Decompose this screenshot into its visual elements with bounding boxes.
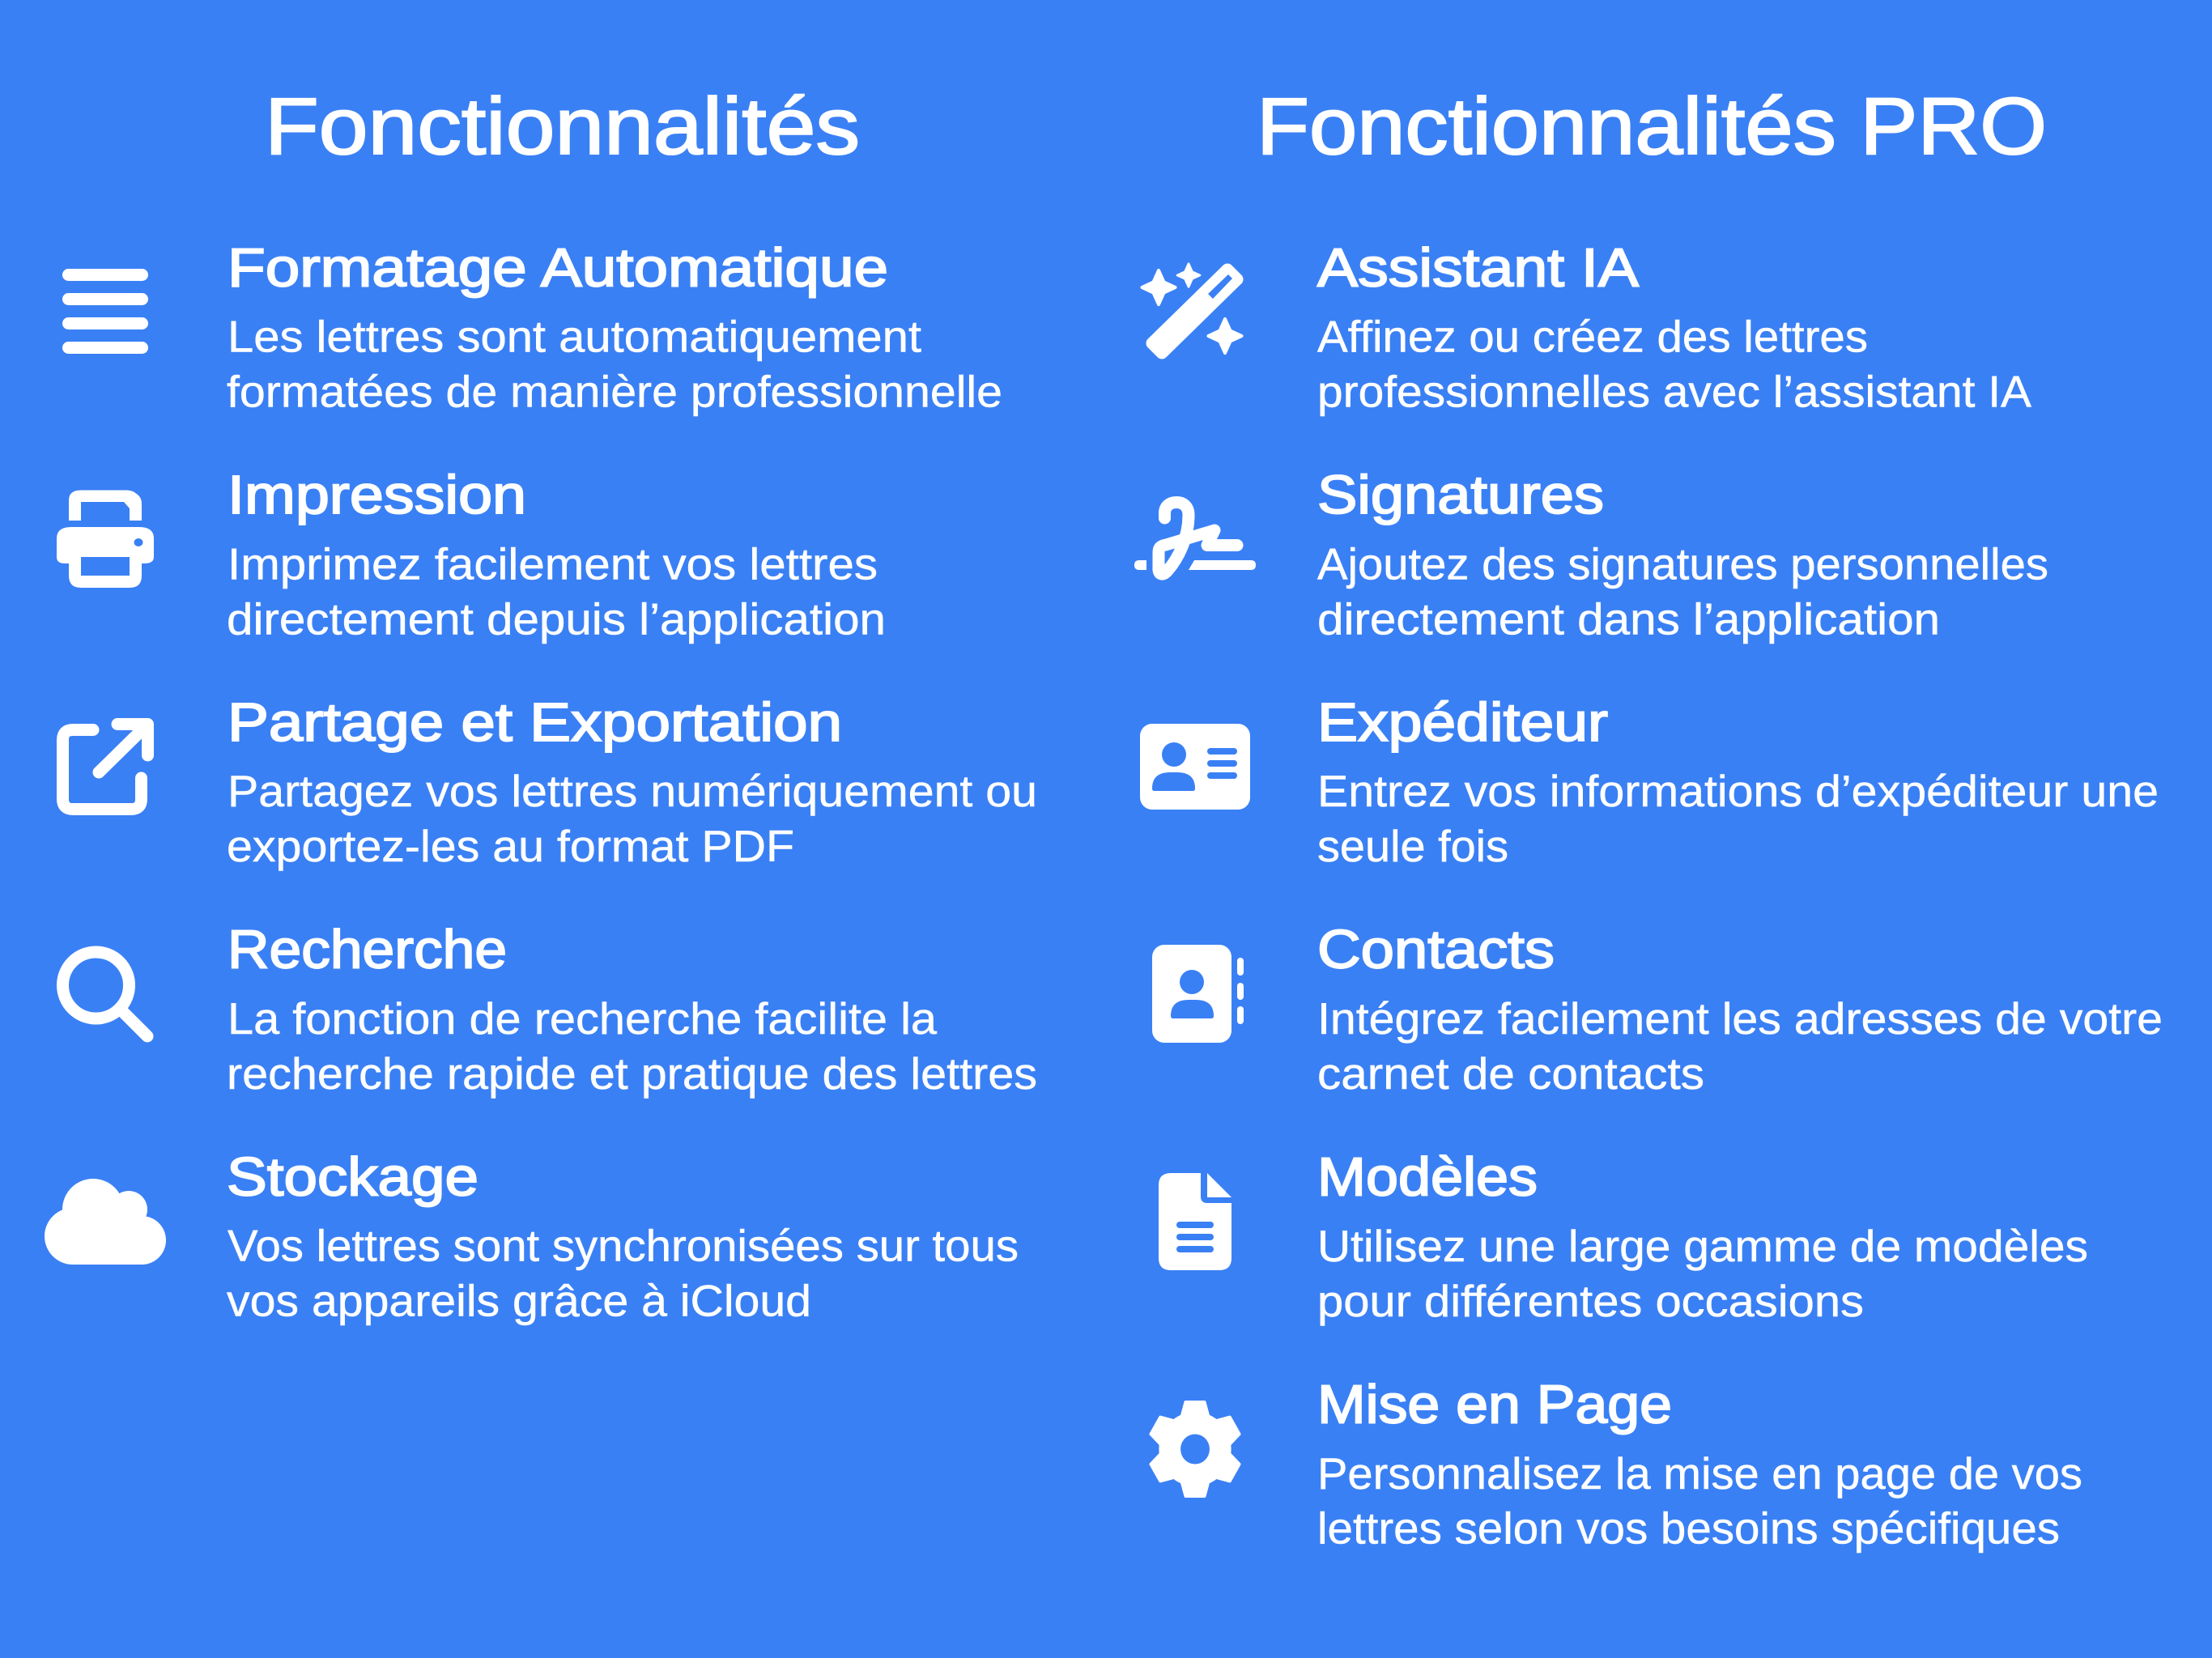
description: carnet de contacts (1317, 1048, 1704, 1099)
icon: document (1159, 1173, 1231, 1270)
title: Fonctionnalités PRO: Fonctionnalités PRO (1257, 81, 2047, 171)
heading: Expéditeur (1317, 692, 1608, 753)
heading: Formatage Automatique (228, 237, 888, 298)
feature: Modèles (1159, 1147, 2088, 1326)
description: professionnelles avec l’assistant IA (1317, 366, 2031, 416)
description: directement depuis l’application (227, 593, 886, 644)
description (227, 993, 1037, 1099)
icon: lines (62, 269, 148, 354)
description: exportez-les au format PDF (227, 821, 794, 871)
heading: Signatures (1317, 465, 1604, 525)
feature: Recherche (63, 920, 1037, 1099)
panel: Fonctionnalités (45, 81, 1037, 1326)
heading: Impression (228, 465, 526, 525)
heading: Partage et Exportation (228, 692, 842, 753)
icon: address book (1152, 945, 1244, 1043)
heading: Recherche (228, 920, 507, 980)
feature: Contacts (1152, 920, 2163, 1099)
description (1317, 538, 2048, 644)
description (1317, 993, 2163, 1099)
description: recherche rapide et pratique des lettres (227, 1048, 1037, 1099)
description (1317, 311, 2031, 416)
description (227, 538, 886, 644)
description: formatées de manière professionnelle (227, 366, 1002, 416)
description: Entrez vos informations d’expéditeur une (1317, 766, 2159, 816)
icon: id card (1140, 724, 1250, 810)
description: lettres selon vos besoins spécifiques (1317, 1503, 2060, 1554)
description: La fonction de recherche facilite la (228, 993, 937, 1044)
description: Imprimez facilement vos lettres (228, 538, 878, 589)
description: Affinez ou créez des lettres (1317, 311, 1868, 361)
icon: printer (57, 491, 154, 588)
title: Fonctionnalités: Fonctionnalités (265, 81, 860, 171)
description (1317, 766, 2159, 871)
description (227, 311, 1002, 416)
icon: gear (1149, 1402, 1241, 1496)
icon: magic wand (1142, 264, 1242, 353)
icon: cloud (45, 1179, 166, 1265)
heading: Modèles (1317, 1147, 1538, 1208)
feature: Signatures (1134, 465, 2048, 644)
description (1317, 1221, 2088, 1326)
description: seule fois (1317, 821, 1508, 871)
feature: Formatage Automatique (62, 237, 1002, 416)
heading: Mise en Page (1317, 1374, 1672, 1435)
icon: signature (1134, 502, 1256, 574)
description (227, 766, 1037, 871)
feature: Stockage (45, 1147, 1019, 1326)
description: Utilisez une large gamme de modèles (1317, 1221, 2088, 1271)
feature: Partage et Exportation (63, 692, 1037, 871)
description (1317, 1448, 2082, 1554)
heading: Stockage (227, 1147, 479, 1208)
icon: magnifier (63, 952, 147, 1036)
heading: Contacts (1317, 920, 1555, 980)
icon: share arrow (63, 724, 147, 810)
panel: Fonctionnalités PRO (1134, 81, 2163, 1554)
description: directement dans l’application (1317, 593, 1940, 644)
feature: Expéditeur (1140, 692, 2159, 871)
heading: Assistant IA (1317, 237, 1639, 298)
description: pour différentes occasions (1317, 1276, 1864, 1326)
description: Ajoutez des signatures personnelles (1317, 538, 2048, 589)
feature: Assistant IA (1142, 237, 2031, 416)
description: Vos lettres sont synchronisées sur tous (228, 1221, 1019, 1271)
description: Les lettres sont automatiquement (228, 311, 921, 361)
description: Intégrez facilement les adresses de votre (1317, 993, 2163, 1044)
description: vos appareils grâce à iCloud (227, 1276, 811, 1326)
feature: Mise en Page (1149, 1374, 2082, 1554)
description: Personnalisez la mise en page de vos (1317, 1448, 2082, 1499)
description (227, 1221, 1019, 1326)
feature: Impression (57, 465, 886, 644)
description: Partagez vos lettres numériquement ou (228, 766, 1037, 816)
